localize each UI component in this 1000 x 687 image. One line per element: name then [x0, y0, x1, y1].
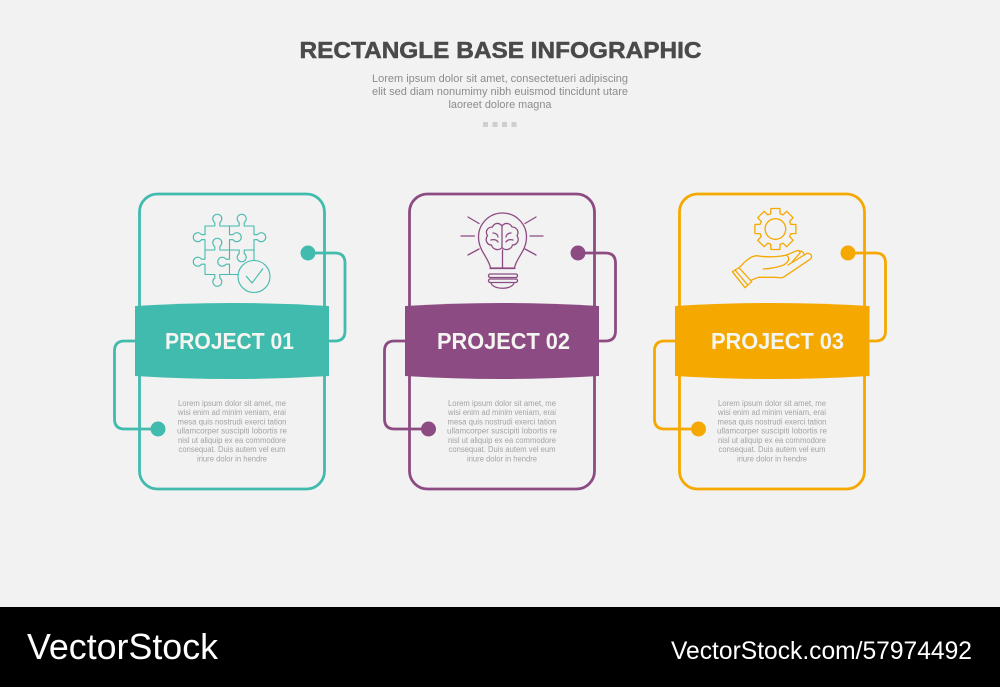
body text: consequat. Duis autem vel eum	[718, 445, 826, 454]
dot left	[691, 422, 706, 436]
body text: consequat. Duis autem vel eum	[448, 445, 556, 454]
subtitle text: Lorem ipsum dolor sit amet, consectetueri adipiscing	[372, 73, 628, 85]
panel: project 03	[654, 194, 886, 489]
body text	[717, 399, 827, 464]
dot right	[570, 246, 586, 260]
subtitle text: laoreet dolore magna	[448, 99, 552, 111]
body text: ullamcorper suscipiti lobortis re	[177, 426, 287, 436]
banner label: PROJECT 01	[165, 328, 294, 354]
body text: Lorem ipsum dolor sit amet, me	[718, 399, 826, 408]
connector left	[384, 341, 428, 429]
card outline	[410, 194, 594, 489]
title: RECTANGLE BASE INFOGRAPHIC	[300, 37, 702, 63]
panel: project 02	[384, 194, 616, 489]
body text: iriure dolor in hendre	[197, 454, 267, 464]
body text: mesa quis nostrudi exerci tation	[178, 418, 286, 426]
icon: light bulb with brain	[461, 213, 543, 288]
dot left	[150, 422, 166, 436]
body text: iriure dolor in hendre	[467, 454, 537, 464]
body text: wisi enim ad minim veniam, erai	[447, 408, 556, 417]
dot left	[421, 422, 436, 436]
subtitle text: elit sed diam nonumimy nibh euismod tincidunt utare	[372, 86, 628, 98]
card outline	[140, 194, 324, 489]
body text: nisl ut aliquip ex ea commodore	[448, 436, 556, 445]
footer url: VectorStock.com/57974492	[671, 637, 972, 665]
body text	[447, 399, 557, 464]
icon: hand holding gear	[732, 208, 812, 288]
body text: wisi enim ad minim veniam, erai	[717, 408, 826, 417]
body text: Lorem ipsum dolor sit amet, me	[178, 399, 286, 408]
body text: mesa quis nostrudi exerci tation	[718, 418, 826, 426]
pagination dots	[483, 122, 516, 127]
card outline	[680, 194, 864, 489]
body text: ullamcorper suscipiti lobortis re	[447, 426, 557, 436]
footer logo: VectorStock	[27, 626, 219, 667]
body text: wisi enim ad minim veniam, erai	[177, 408, 286, 417]
subtitle text	[372, 73, 628, 111]
connector right	[308, 253, 345, 341]
body text: nisl ut aliquip ex ea commodore	[178, 436, 286, 445]
banner	[405, 303, 599, 379]
body text: mesa quis nostrudi exerci tation	[448, 418, 556, 426]
panel: project 01	[114, 194, 345, 489]
connector right	[578, 253, 616, 341]
connector right	[848, 253, 886, 341]
body text: nisl ut aliquip ex ea commodore	[718, 436, 826, 445]
banner label: PROJECT 02	[437, 328, 570, 354]
footer bar	[0, 607, 1000, 687]
icon: puzzle with check	[193, 214, 270, 292]
dot right	[300, 246, 316, 260]
banner label: PROJECT 03	[711, 328, 844, 354]
body text: ullamcorper suscipiti lobortis re	[717, 426, 827, 436]
body text: Lorem ipsum dolor sit amet, me	[448, 399, 556, 408]
banner	[135, 303, 329, 379]
connector left	[654, 341, 698, 429]
body text: iriure dolor in hendre	[737, 454, 807, 464]
dot right	[840, 246, 856, 260]
body text	[177, 399, 287, 464]
body text: consequat. Duis autem vel eum	[178, 445, 286, 454]
banner	[675, 303, 870, 379]
connector left	[114, 341, 158, 429]
